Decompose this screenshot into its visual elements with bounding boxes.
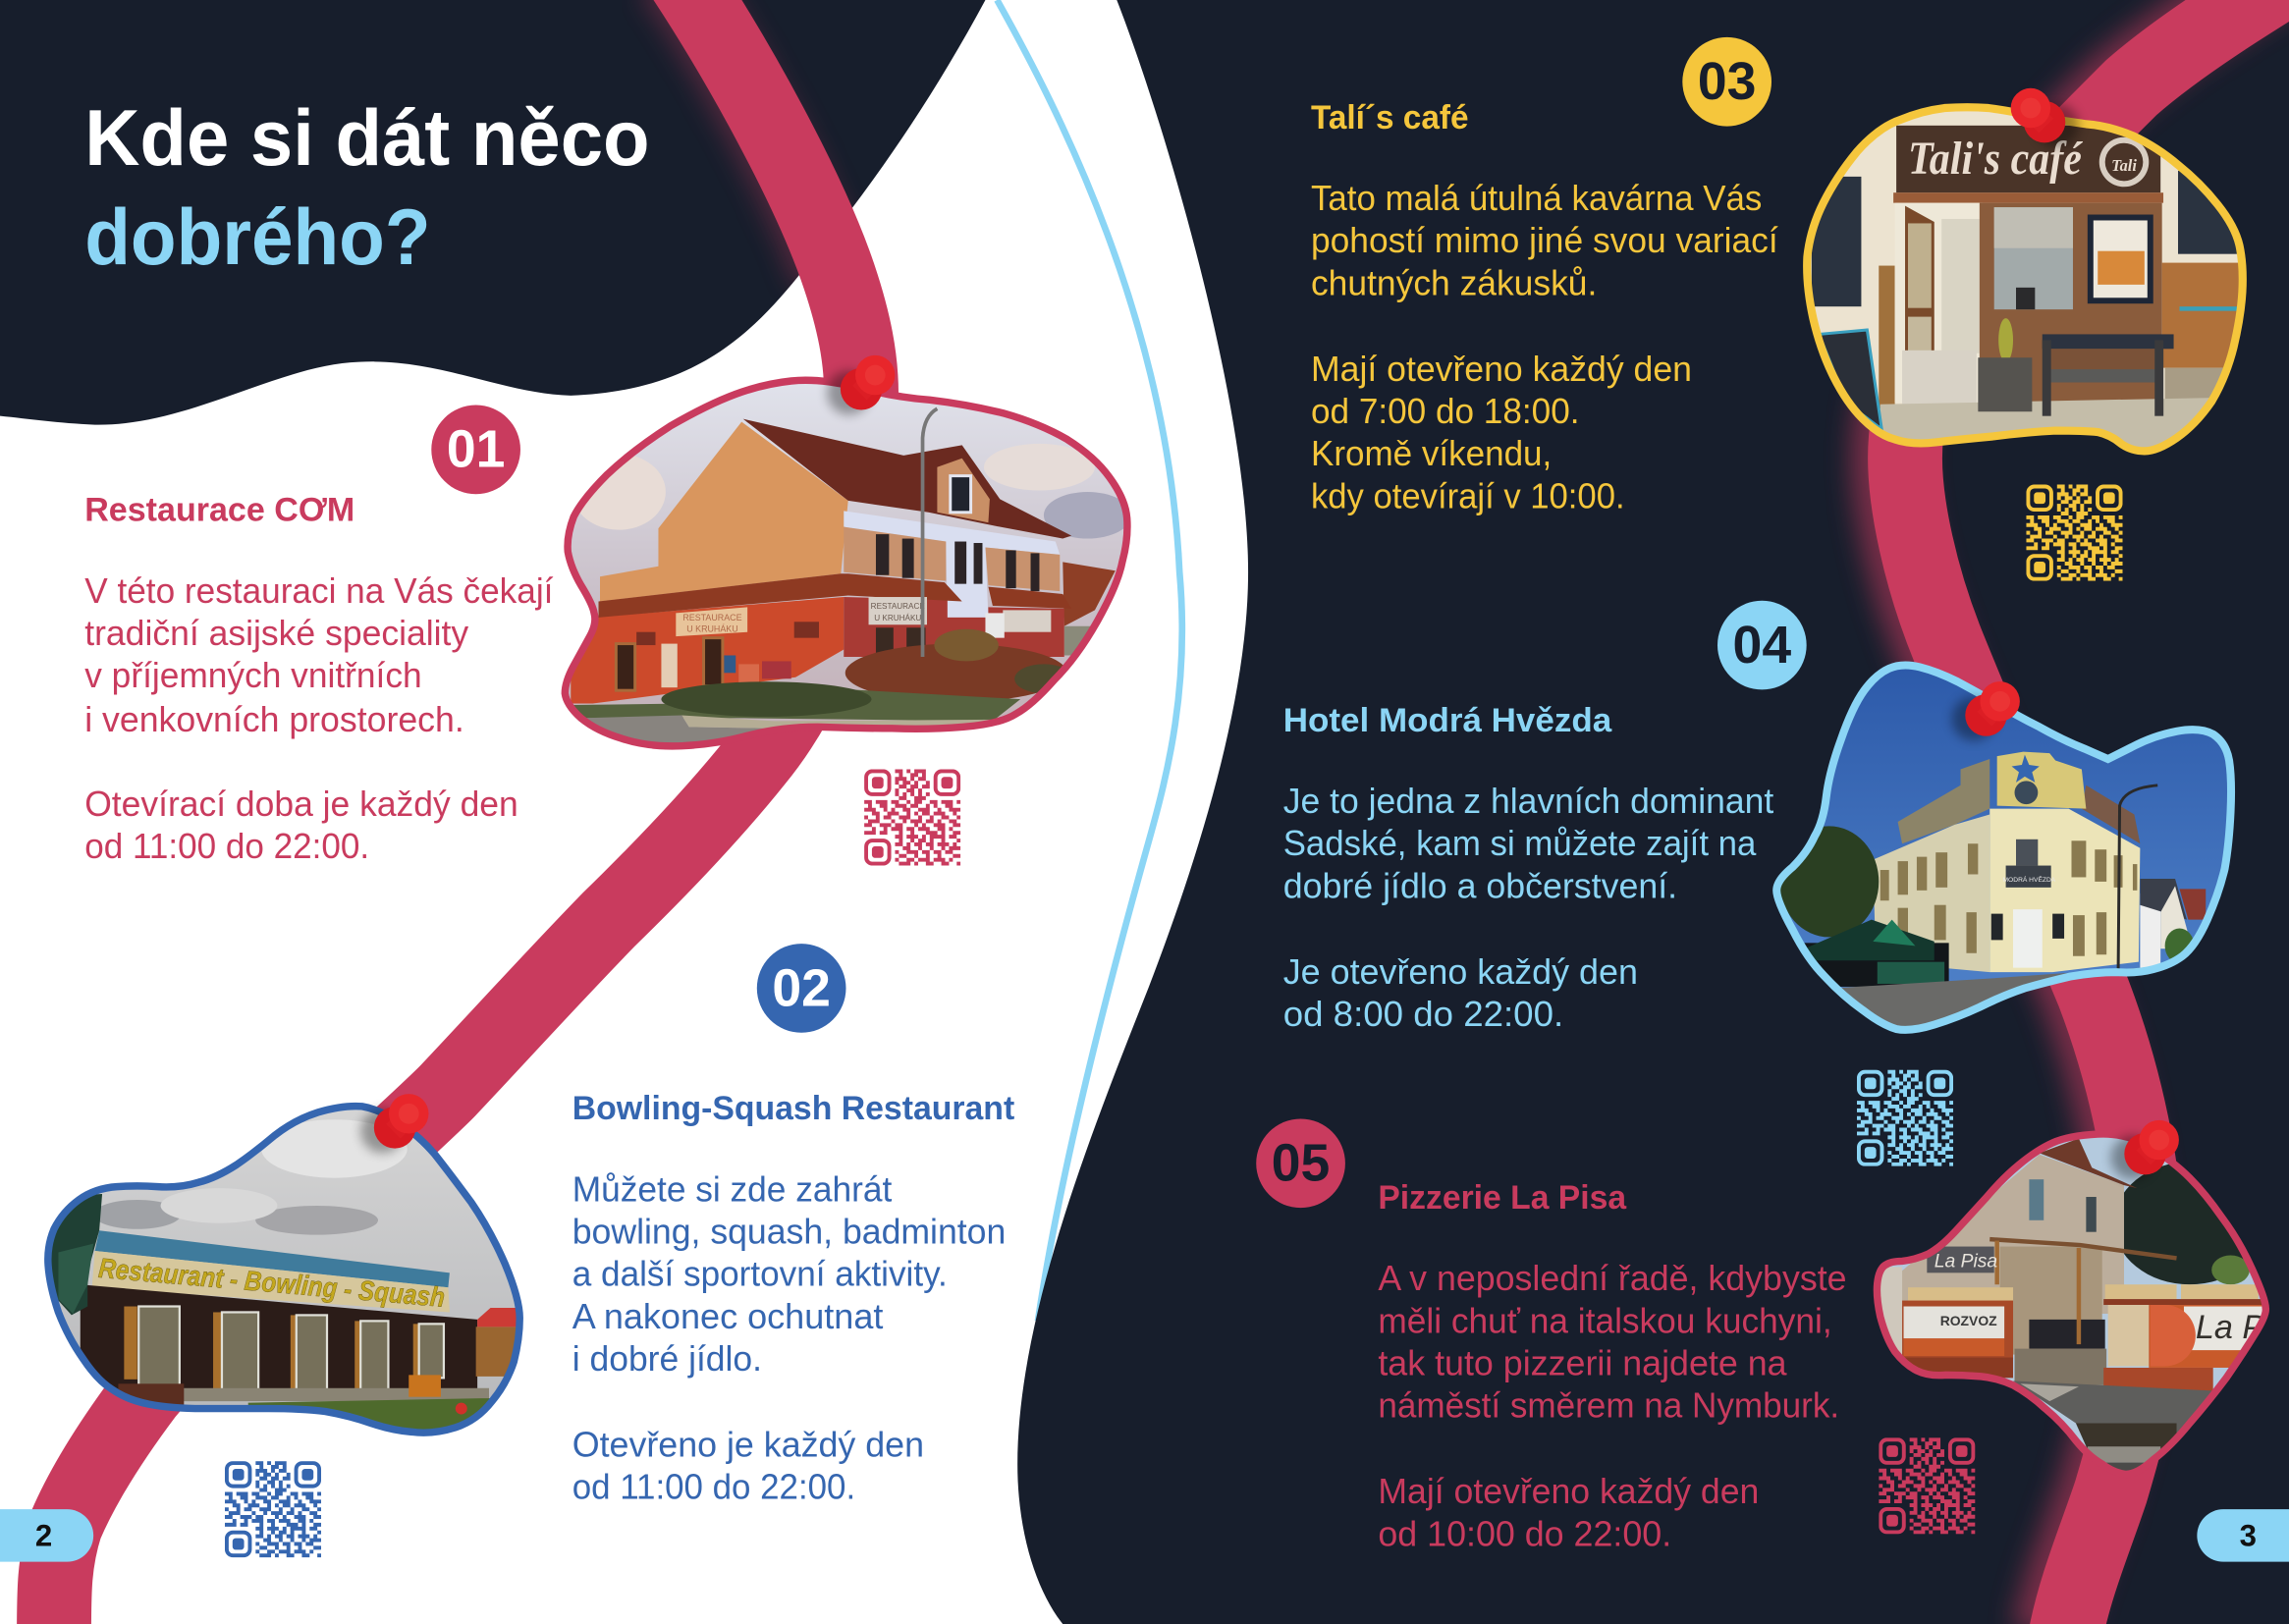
text block: Restaurace CƠM: Otevírací doba je každý den [84, 785, 518, 824]
text block: Restaurace CƠM: Restaurace CƠM [84, 492, 354, 529]
text block: Hotel Modrá Hvězda: od 8:00 do 22:00. [1283, 995, 1563, 1034]
number badge 05: 05 [1272, 1135, 1330, 1193]
text block: Pizzerie La Pisa: A v neposlední řadě, kdybyste [1378, 1259, 1847, 1298]
text block: Tali's cafe: pohostí mimo jiné svou variací [1311, 221, 1778, 260]
pink route left page [54, 0, 861, 1624]
photo 3: cafe front: Tali's café [1908, 134, 2084, 185]
photo 5: pizzeria [1869, 1124, 2285, 1482]
text block: Pizzerie La Pisa [1378, 1179, 1847, 1553]
number badge 04 [1717, 601, 1807, 689]
text block: Pizzerie La Pisa: Mají otevřeno každý den [1378, 1472, 1759, 1511]
qr code 2 [225, 1463, 321, 1555]
text block: Bowling-Squash Restaurant: Můžete si zde zahrát [572, 1169, 892, 1209]
text block: Restaurace CƠM [84, 492, 554, 866]
text block: Restaurace CƠM: i venkovních prostorech. [84, 700, 464, 739]
text block: Hotel Modrá Hvězda: Hotel Modrá Hvězda [1283, 702, 1612, 739]
text block: Tali's cafe: Tato malá útulná kavárna Vás [1311, 179, 1762, 218]
text block: Hotel Modrá Hvězda [1283, 702, 1773, 1034]
text block: Bowling-Squash Restaurant [572, 1090, 1014, 1507]
pin 3 [2011, 88, 2079, 147]
text block: Hotel Modrá Hvězda: Je otevřeno každý den [1283, 952, 1638, 992]
text block: Hotel Modrá Hvězda: Je to jedna z hlavních dominant [1283, 782, 1773, 821]
photo 1: restaurant building: U KRUHÁKU [874, 613, 921, 623]
text block: Pizzerie La Pisa: Pizzerie La Pisa [1378, 1179, 1627, 1217]
text block: Bowling-Squash Restaurant: Bowling-Squash Restaurant [572, 1090, 1014, 1127]
photo 1: restaurant building: RESTAURACE [682, 613, 742, 623]
photo 1: restaurant building: U KRUHÁKU [686, 624, 738, 634]
photo 3: cafe front: Tali [2111, 156, 2137, 175]
photo 3: cafe front [1803, 103, 2247, 456]
photo 2: bowling restaurant: Restaurant - Bowling - Squash [97, 1252, 446, 1313]
photo 5: pizzeria: La Pisa [1935, 1251, 1997, 1272]
text block: Bowling-Squash Restaurant: od 11:00 do 22:00. [572, 1468, 855, 1507]
text block: Bowling-Squash Restaurant: i dobré jídlo. [572, 1339, 762, 1379]
text block: Hotel Modrá Hvězda: dobré jídlo a občerstvení. [1283, 866, 1677, 905]
pink route right page [1905, 0, 2289, 1624]
text block: Pizzerie La Pisa: od 10:00 do 22:00. [1378, 1514, 1671, 1553]
qr code 5 [1879, 1439, 1975, 1532]
pin 2 [360, 1094, 428, 1153]
number badge 02 [757, 944, 845, 1033]
photo 4: hotel [1772, 662, 2235, 1034]
text block: Pizzerie La Pisa: měli chuť na italskou kuchyni, [1378, 1301, 1832, 1340]
page number 3 [2197, 1509, 2289, 1562]
title: dobrého? [84, 193, 431, 282]
number badge 05 [1256, 1118, 1345, 1208]
text block: Restaurace CƠM: od 11:00 do 22:00. [84, 827, 369, 866]
text block: Bowling-Squash Restaurant: A nakonec ochutnat [572, 1297, 883, 1336]
photo 5: pizzeria: La P [2196, 1309, 2264, 1346]
pin 1 [827, 355, 895, 414]
light blue curve line [997, 0, 1182, 1321]
photo 1: restaurant building [555, 365, 1139, 759]
pink route glow right page [1887, 0, 2289, 1624]
text block: Tali's cafe: Mají otevřeno každý den [1311, 350, 1692, 389]
number badge 03: 03 [1698, 53, 1756, 111]
text block: Tali's cafe: Kromě víkendu, [1311, 434, 1552, 473]
pin 4 [1952, 681, 2020, 740]
number badge 01: 01 [447, 421, 505, 479]
number badge 01 [431, 406, 520, 494]
text block: Bowling-Squash Restaurant: bowling, squash, badminton [572, 1213, 1006, 1252]
dark right panel [1017, 0, 2289, 1624]
text block: Tali's cafe: kdy otevírají v 10:00. [1311, 476, 1625, 515]
photo 5: pizzeria: ROZVOZ [1940, 1313, 1997, 1328]
text block: Hotel Modrá Hvězda: Sadské, kam si můžete zajít na [1283, 824, 1757, 863]
photo 4: hotel: MODRÁ HVĚZDA [2003, 875, 2056, 884]
number badge 03 [1682, 37, 1771, 127]
page number 2 [0, 1509, 93, 1562]
photo 1: restaurant building: RESTAURACE [871, 602, 925, 611]
text block: Restaurace CƠM: V této restauraci na Vás čekají [84, 571, 554, 611]
text block: Pizzerie La Pisa: tak tuto pizzerii najdete na [1378, 1343, 1787, 1382]
page number 2: 2 [35, 1518, 52, 1552]
pin 5 [2111, 1120, 2179, 1179]
text block: Tali's cafe: chutných zákusků. [1311, 263, 1597, 302]
text block: Tali's cafe: od 7:00 do 18:00. [1311, 392, 1580, 431]
pink route glow on header [670, 0, 831, 277]
number badge 02: 02 [772, 959, 831, 1017]
text block: Pizzerie La Pisa: náměstí směrem na Nymburk. [1378, 1385, 1839, 1425]
qr code 3 [2026, 487, 2123, 579]
number badge 04: 04 [1733, 617, 1791, 675]
text block: Bowling-Squash Restaurant: a další sportovní aktivity. [572, 1255, 948, 1294]
text block: Restaurace CƠM: tradiční asijské speciality [84, 614, 468, 653]
page number 3: 3 [2240, 1518, 2257, 1552]
text block: Bowling-Squash Restaurant: Otevřeno je každý den [572, 1426, 924, 1465]
dark header shape [0, 0, 985, 425]
photo 2: bowling restaurant [36, 1095, 533, 1452]
title [84, 94, 650, 282]
qr code 4 [1857, 1072, 1953, 1164]
text block: Tali's cafe [1311, 99, 1778, 515]
text block: Restaurace CƠM: v příjemných vnitřních [84, 656, 422, 695]
qr code 1 [864, 771, 960, 864]
title: Kde si dát něco [84, 94, 650, 183]
text block: Tali's cafe: Talí´s café [1311, 99, 1469, 136]
